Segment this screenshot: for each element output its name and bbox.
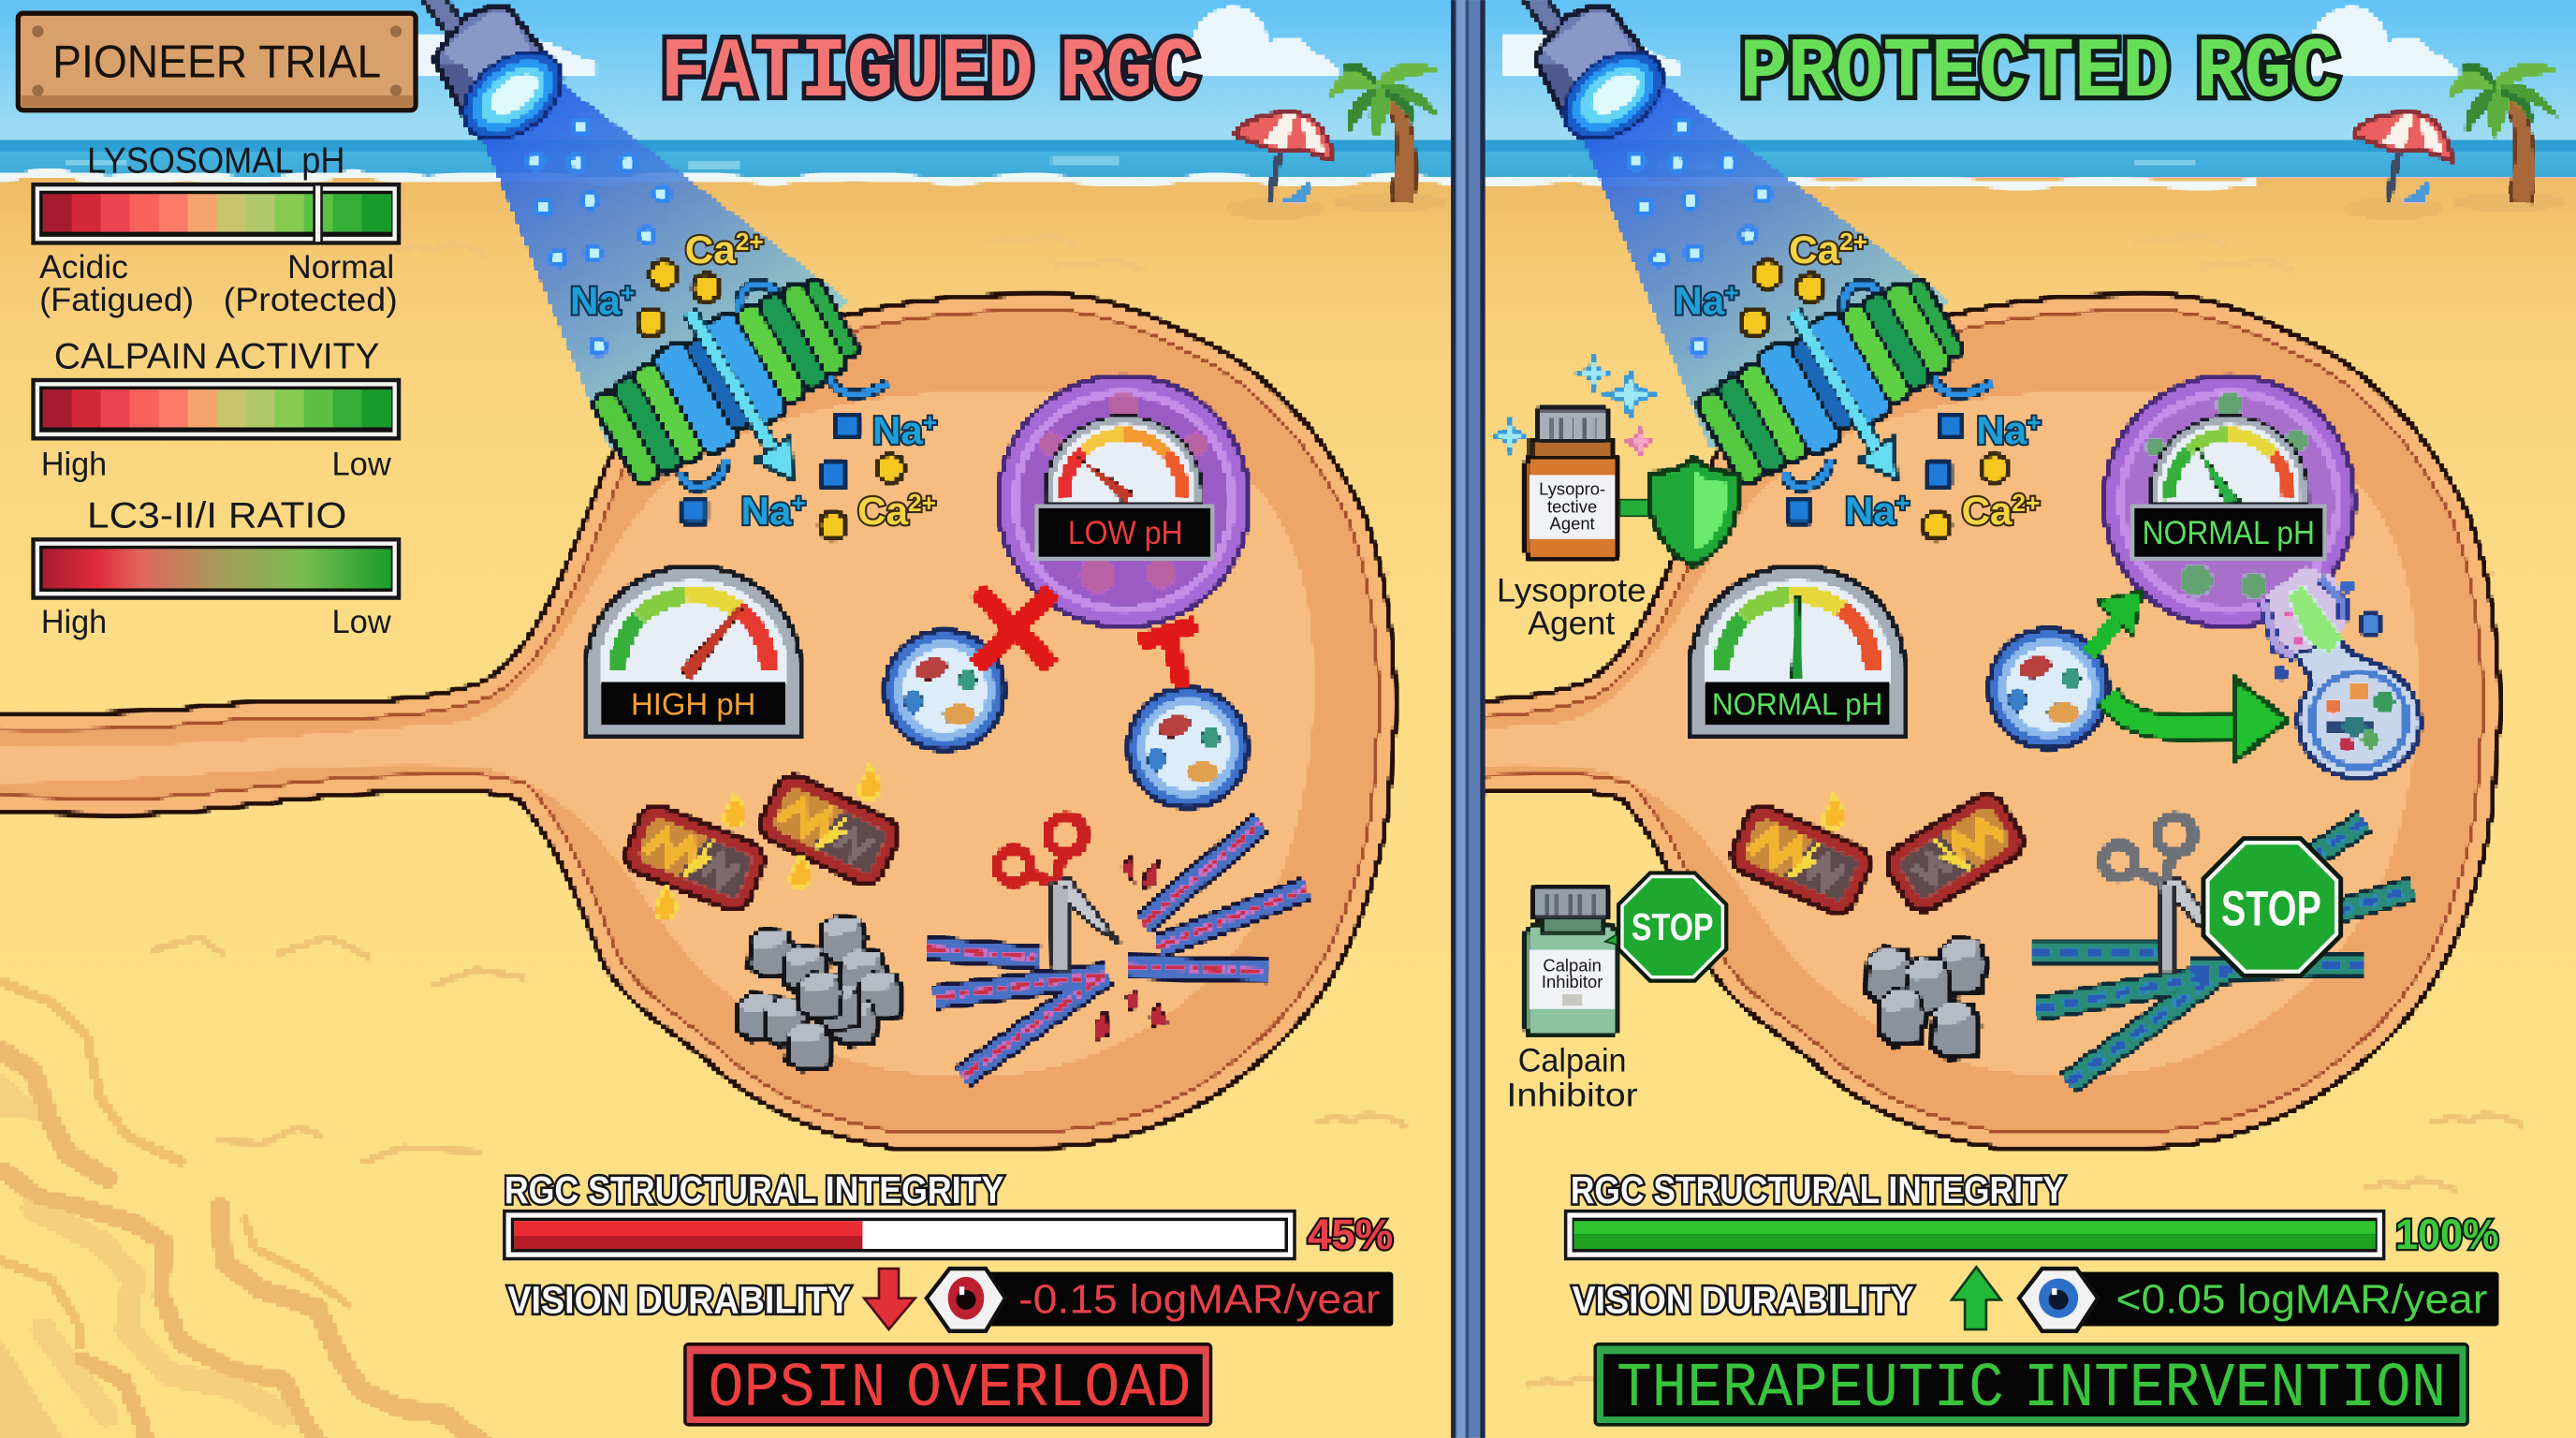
ion labels: + [1724, 278, 1739, 306]
bar labels: acidic and normal [39, 249, 398, 318]
ion labels: 2+ [2012, 489, 2040, 517]
calpain scissors: inactive [2103, 816, 2217, 973]
label: vision durability: VISION DURABILITY [1573, 1278, 1914, 1321]
neuron cell body and axon [0, 313, 1377, 1130]
ion labels: Ca [857, 489, 908, 533]
label: lysoprotective agent: Lysoprote [1497, 573, 1647, 609]
value: 100 percent: 100% [2395, 1211, 2499, 1258]
panel: protected RGC [1049, 0, 2565, 1425]
heading: calpain activity: CALPAIN ACTIVITY [54, 336, 379, 376]
autophagosome: fusing [1989, 629, 2108, 748]
lysosome with normal pH gauge [2104, 376, 2354, 626]
lysosome with low pH gauge [999, 376, 1249, 626]
gauge: high pH [587, 567, 800, 736]
integrity bar 45 percent [503, 1210, 1296, 1260]
autophagosome: blocked [886, 631, 1003, 749]
heading: lysosomal pH: LYSOSOMAL pH [87, 140, 345, 181]
inhibition T bar [1140, 624, 1196, 687]
neck and autolysosome [2264, 567, 2420, 777]
label: lysoprotective agent: Agent [1528, 606, 1616, 642]
sparkles [1495, 359, 1652, 455]
bar labels: calpain: Low [332, 446, 391, 482]
ion labels [570, 227, 937, 533]
ion labels: Ca [685, 227, 736, 271]
wooden trial sign: PIONEER TRIAL [52, 37, 381, 88]
damaged mitochondria [622, 766, 904, 919]
arrow: improvement [1952, 1267, 2001, 1329]
vision decline readout [927, 1269, 1393, 1331]
ion labels: + [2027, 408, 2042, 436]
vision decline readout: -0.15 logMAR/year [1018, 1276, 1380, 1322]
autophagosome: inhibited [1129, 689, 1247, 807]
gauge: high pH: HIGH pH [631, 688, 755, 723]
calpain scissors: active [997, 816, 1120, 970]
title: fatigued RGC: FATIGUED RGC [661, 25, 1199, 122]
arrow: to autolysosome [2108, 681, 2287, 759]
sand marks [1528, 235, 2524, 1388]
heading: LC3 ratio: LC3-II/I RATIO [87, 496, 346, 536]
ion labels: Na [1674, 278, 1724, 322]
vision stable readout: <0.05 logMAR/year [2116, 1276, 2487, 1322]
ion labels: Na [872, 408, 923, 452]
clouds [419, 7, 1340, 74]
arrow: decline [864, 1269, 915, 1329]
vision stable readout [2019, 1269, 2499, 1331]
debris fragments [1096, 858, 1166, 1040]
ion labels: Ca [1962, 489, 2012, 533]
gauge bar: calpain activity [31, 378, 401, 441]
umbrella and palm [2345, 64, 2565, 219]
lysoprotective bottle: Agent [1550, 513, 1595, 533]
bar labels: LC3 [41, 604, 391, 640]
lysosome with normal pH gauge: NORMAL pH [2143, 515, 2315, 551]
intact opsin fibers [2034, 822, 2411, 1083]
title: protected RGC: PROTECTED RGC [1740, 25, 2339, 122]
neuron cell body and axon [1049, 313, 2481, 1130]
bar labels: acidic and normal: Acidic [39, 249, 128, 286]
wooden trial sign [18, 13, 416, 110]
ion labels: Na [570, 278, 621, 322]
gauge bar: lysosomal pH [31, 183, 401, 245]
ion labels [1674, 227, 2042, 533]
stop sign: scissors [2201, 836, 2343, 978]
ion labels: Na [741, 489, 791, 533]
stop sign: scissors: STOP [2221, 881, 2321, 936]
sand ripples [0, 937, 524, 1438]
lysoprotective bottle: tective [1547, 497, 1597, 517]
label: RGC structural integrity: RGC STRUCTURAL INTEGRITY [1571, 1168, 2065, 1211]
calpain inhibitor bottle: Calpain [1543, 955, 1602, 975]
connector to shield [1620, 500, 1656, 516]
banner: opsin overload: OPSIN OVERLOAD [708, 1354, 1191, 1425]
calpain inhibitor bottle: Inhibitor [1542, 972, 1603, 991]
recovering mitochondria [1726, 789, 2029, 917]
icon: blue eye [2019, 1269, 2098, 1331]
ion labels: Ca [1789, 227, 1839, 271]
red block cross [977, 592, 1051, 666]
ion channel with ions [587, 261, 903, 539]
ion labels: 2+ [1839, 227, 1867, 256]
bar labels: LC3: High [41, 604, 107, 640]
reduced protein aggregates [1866, 939, 1985, 1058]
banner: therapeutic intervention: THERAPEUTIC INTERVENTION [1617, 1354, 2446, 1425]
biomarker legend [31, 140, 401, 640]
umbrella and palm [1225, 64, 1445, 219]
label: calpain inhibitor [1506, 1042, 1638, 1113]
panel: fatigued RGC [0, 0, 1445, 1425]
bar labels: acidic and normal: (Protected) [224, 282, 398, 318]
ion labels: 2+ [908, 489, 936, 517]
stop sign: calpain inhibitor: STOP [1632, 905, 1714, 948]
ion channel with ions [1690, 261, 2008, 539]
ion labels: Na [1976, 408, 2027, 452]
label: calpain inhibitor: Calpain [1518, 1042, 1627, 1078]
bar labels: acidic and normal: Normal [287, 249, 394, 286]
protein aggregates [738, 917, 902, 1070]
label: lysoprotective agent [1497, 573, 1647, 642]
lysoprotective bottle [1526, 409, 1618, 559]
bar labels: calpain: High [41, 446, 107, 482]
stop sign: calpain inhibitor [1605, 871, 1728, 983]
label: vision durability: VISION DURABILITY [507, 1278, 851, 1321]
icon: shield [1649, 459, 1738, 565]
bar labels: LC3: Low [332, 604, 391, 640]
lysoprotective bottle: Lysopro- [1539, 478, 1605, 498]
arrow: to lysosome [2089, 592, 2143, 654]
icon: red eye [927, 1269, 1005, 1331]
value: 45 percent: 45% [1308, 1211, 1393, 1258]
bar labels: calpain [41, 446, 391, 482]
bar labels: acidic and normal: (Fatigued) [39, 282, 194, 318]
sand marks [394, 235, 1406, 1125]
spotlight and light beam [1531, 0, 1949, 448]
clouds [1503, 7, 2459, 74]
lysosome with low pH gauge: LOW pH [1068, 515, 1183, 551]
ion labels: + [1895, 489, 1910, 517]
ion labels: + [923, 408, 937, 436]
gauge bar: LC3 ratio [31, 537, 401, 600]
center divider [1451, 0, 1486, 1438]
ion labels: 2+ [736, 227, 764, 256]
ion labels: Na [1845, 489, 1895, 533]
ion labels: + [791, 489, 806, 517]
label: RGC structural integrity: RGC STRUCTURAL INTEGRITY [505, 1168, 1003, 1211]
spotlight and light beam [431, 0, 848, 448]
integrity bar 100 percent [1564, 1210, 2385, 1260]
gauge: normal pH [1690, 567, 1904, 736]
gauge: normal pH: NORMAL pH [1712, 688, 1882, 723]
calpain inhibitor bottle [1526, 888, 1617, 1035]
label: calpain inhibitor: Inhibitor [1506, 1077, 1638, 1113]
cleaved opsin fibers [929, 823, 1306, 1077]
ion labels: + [621, 278, 635, 306]
